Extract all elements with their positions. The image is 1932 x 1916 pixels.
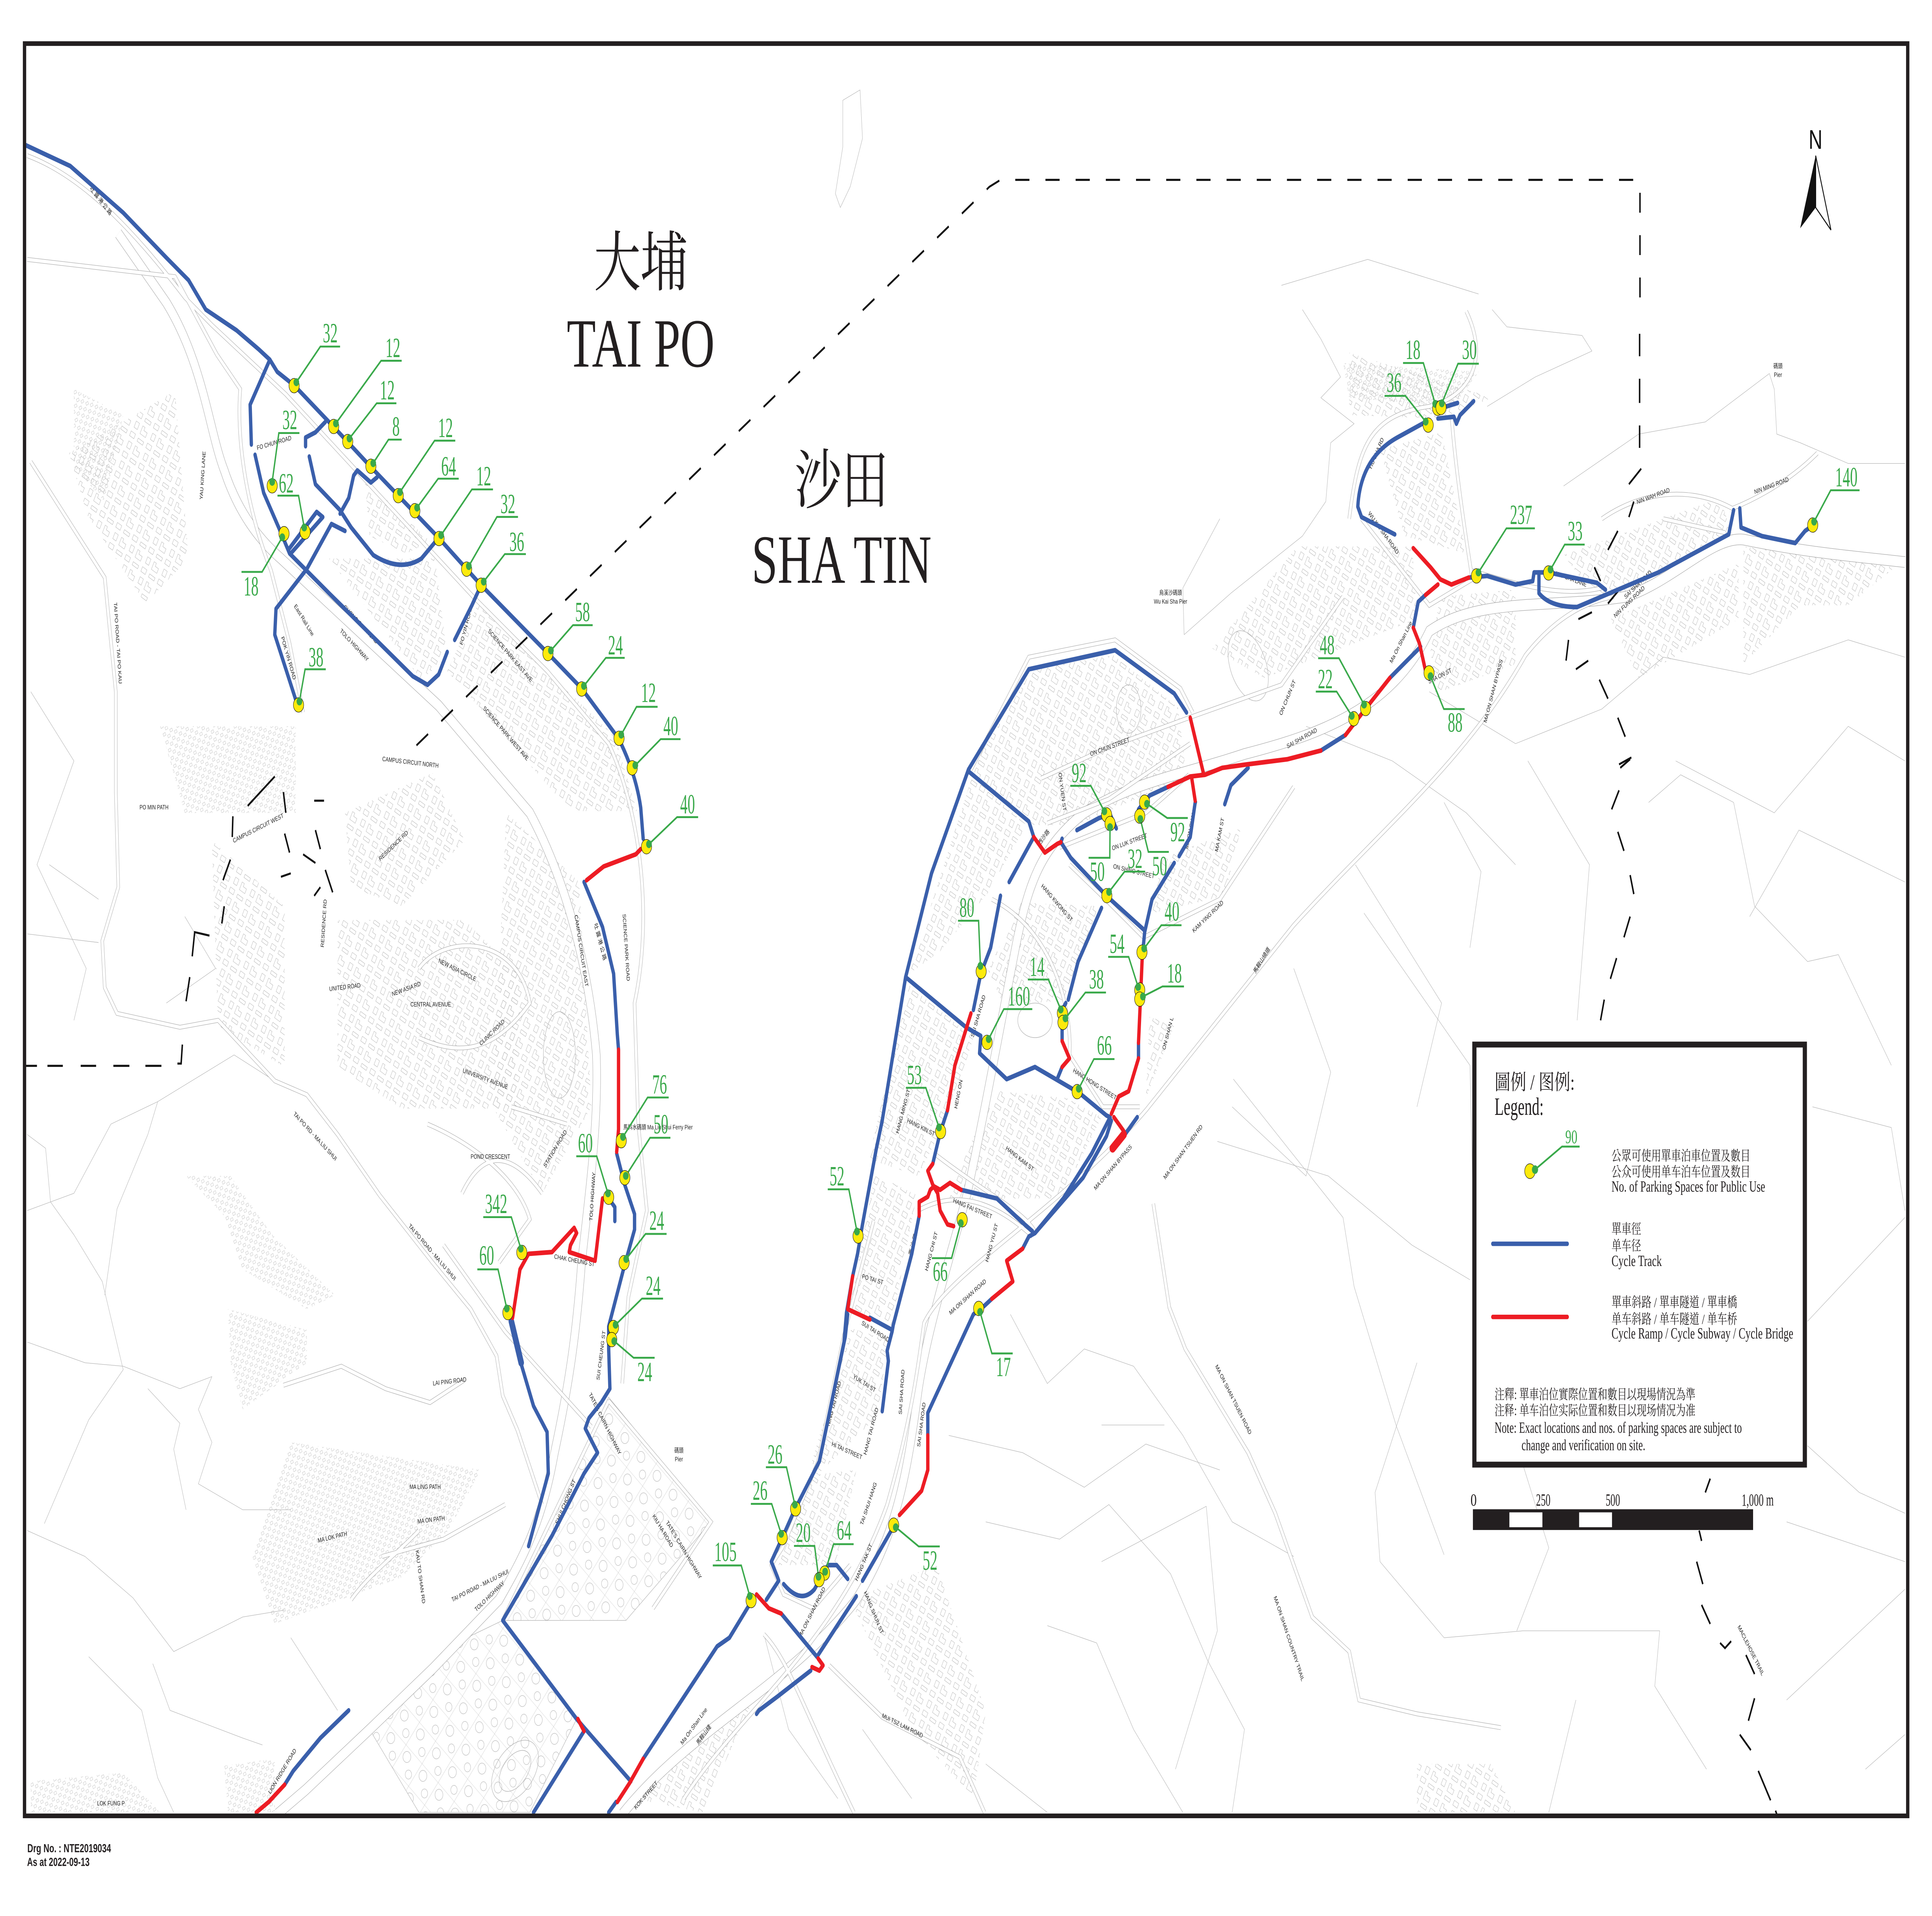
road names: HANG HONG STREET [1072, 1067, 1117, 1102]
legend symbol: cycle track [1493, 1243, 1567, 1244]
legend text: cycle ramp: 单车斜路 / 单车隧道 / 单车桥 [1612, 1311, 1737, 1327]
parking 92 [1070, 758, 1112, 822]
road names: YAU KING LANE [199, 451, 207, 500]
road names: ON CHUN ST [1279, 679, 1297, 717]
parking 24 [619, 1206, 667, 1270]
parking 60 [576, 1128, 614, 1205]
road names: KAM YING ROAD [1192, 899, 1225, 934]
parking 140 [1808, 462, 1859, 532]
parking 92 [1139, 795, 1188, 847]
road names: NEW ASIA RD [391, 980, 421, 998]
parking 22 [1316, 664, 1359, 726]
road names: 西沙路 [1037, 828, 1051, 847]
legend note: Note: Exact locations and nos. of parking spaces are subject to [1495, 1419, 1742, 1436]
road names: 馬鞍山繞道 [1252, 946, 1271, 975]
road names: NIN FUNG ROAD [1613, 585, 1646, 620]
parking 88 [1424, 665, 1464, 738]
road names: Ma On Shan Line [1389, 620, 1413, 665]
parking 30: 30 [1462, 335, 1477, 365]
parking 17 [973, 1301, 1013, 1382]
road names: MA LING PATH [410, 1484, 441, 1491]
parking 12 [342, 375, 396, 449]
parking 50: 50 [1152, 851, 1167, 881]
place name: Sha Tin: 沙田 [795, 444, 888, 517]
road names: MA ON SHAN RD [1184, 799, 1199, 850]
road names: YUK TAI ST [852, 1373, 876, 1394]
road names: Pier [675, 1456, 683, 1463]
parking 66 [1072, 1031, 1114, 1099]
road names: LION RIDGE ROAD [267, 1747, 298, 1796]
parking 62: 62 [279, 468, 294, 499]
parking 22: 22 [1318, 664, 1333, 694]
road names: KIU HA ROAD [651, 1513, 674, 1549]
parking 88: 88 [1448, 708, 1463, 738]
legend text: parking spaces [1612, 1148, 1765, 1195]
road names: 馬料水碼頭 Ma Liu Shui Ferry Pier [623, 1123, 693, 1131]
road names: HANG TAI ROAD [863, 1407, 879, 1456]
road names: POND CRESCENT [471, 1154, 510, 1160]
road names: TATE'S CAIRN HIGHWAY [588, 1392, 622, 1457]
parking 36: 36 [1387, 368, 1401, 398]
legend note: change and verification on site. [1522, 1436, 1645, 1454]
parking 64 [410, 451, 459, 518]
road names: 碼頭 [674, 1447, 684, 1455]
parking 62 [277, 468, 310, 539]
parking 58 [543, 597, 593, 661]
parking 66: 66 [1097, 1031, 1112, 1061]
legend text: cycle track: 單車徑 [1612, 1221, 1641, 1237]
road names: FO CHUN ROAD [257, 435, 292, 452]
parking 12 [614, 678, 658, 745]
parking 26: 26 [753, 1476, 767, 1506]
road names: LOK FUNG P [97, 1800, 125, 1807]
parking 342: 342 [485, 1189, 507, 1219]
road names: RESIDENCE RD [378, 829, 409, 863]
road names: HANG MING ST [895, 1088, 911, 1135]
road names: Pier [1774, 372, 1782, 379]
road names: KOK STREET [633, 1780, 659, 1811]
parking 12: 12 [438, 413, 453, 443]
drawing reference: Drg No. : NTE2019034 [27, 1841, 111, 1855]
parking 32 [267, 405, 299, 493]
parking 18 [1134, 958, 1184, 1006]
parking 14: 14 [1030, 952, 1044, 982]
parking 12: 12 [476, 461, 491, 492]
parking 18: 18 [1406, 335, 1420, 365]
parking 80: 80 [959, 893, 974, 923]
road names: SAI SHA ROAD [1623, 569, 1653, 601]
parking 32: 32 [1128, 844, 1143, 874]
road names: NEW ASIA CIRCLE [438, 957, 477, 983]
legend heading: Legend: [1495, 1093, 1544, 1121]
road names: HENG ON [953, 1079, 964, 1109]
road names: TOLO HIGHWAY [588, 1172, 597, 1221]
road names: ON CHUN STREET [1090, 736, 1130, 758]
legend text: parking spaces: No. of Parking Spaces for Public Use [1612, 1178, 1765, 1195]
north arrow [1800, 124, 1831, 230]
parking 32: 32 [500, 489, 515, 519]
road names: HANG TAK ST [854, 1542, 874, 1582]
legend symbol: parking spaces: 90 [1565, 1126, 1577, 1148]
parking 60 [477, 1240, 513, 1320]
parking 40 [641, 790, 698, 854]
road names: SCIENCE PARK WEST AVE [482, 705, 529, 762]
panel: legend [1475, 1045, 1805, 1465]
parking 66 [932, 1213, 968, 1287]
road names: TAI PO ROAD - TAI PO KAU [112, 602, 122, 684]
road names: HANG SHUN ST [863, 1590, 884, 1635]
drawing reference [27, 1841, 111, 1869]
parking 54 [1108, 929, 1145, 997]
parking 76: 76 [652, 1070, 667, 1100]
parking 52: 52 [923, 1546, 937, 1576]
parking 12 [393, 413, 455, 503]
road names: ON SHING STREET [1113, 863, 1155, 880]
road names: SUI CHEUNG ST [596, 1330, 607, 1381]
tank farm and industrial blocks [370, 1397, 711, 1812]
legend heading [1495, 1070, 1575, 1121]
road names: RESIDENCE RD [320, 899, 328, 948]
road names: CHONG SAN ROAD [342, 604, 379, 646]
road names: TAI PO ROAD - MA LIU SHUI [451, 1568, 509, 1604]
road names: 馬鞍山綫 [696, 1723, 712, 1747]
road names: PO MIN PATH [139, 804, 168, 811]
legend text: cycle track: 单车径 [1612, 1238, 1641, 1254]
parking 48 [1318, 630, 1371, 716]
road names: LAI PING ROAD [433, 1376, 467, 1387]
road names: MUI TSZ LAM ROAD [881, 1712, 923, 1740]
road names: NIN MING ROAD [1754, 476, 1789, 496]
parking 80 [958, 893, 986, 978]
place name: Tai Po: TAI PO [567, 305, 714, 382]
legend symbol: parking spaces [1525, 1126, 1580, 1179]
legend note: 注釋: 單車泊位實際位置和數目以現場情況為準 [1495, 1387, 1696, 1402]
road names: YIU SHA RD [1368, 436, 1385, 471]
parking 50: 50 [653, 1109, 668, 1140]
legend text: parking spaces: 公众可使用单车泊车位置及数目 [1612, 1164, 1750, 1179]
road names: East Rail Line [293, 603, 315, 638]
road names: TOLO HIGHWAY [339, 628, 369, 664]
parking 105 [713, 1537, 756, 1608]
road names: MA ON SHAN BYPASS [1093, 1143, 1133, 1192]
parking 24: 24 [649, 1206, 664, 1236]
road names: KAU TO SHAN RD [414, 1550, 426, 1604]
parking 40: 40 [1165, 897, 1179, 927]
road names: CAMPUS CIRCUIT NORTH [382, 756, 439, 770]
road names: 烏溪沙碼頭 [1159, 589, 1182, 597]
parking 54: 54 [1110, 929, 1124, 959]
road names: MA ON PATH [417, 1515, 445, 1525]
legend text: cycle track: Cycle Track [1612, 1252, 1662, 1269]
scale bar: 500 [1605, 1491, 1620, 1509]
place name: Tai Po: 大埔 [594, 226, 687, 299]
road names: CAMPUS CIRCUIT WEST [232, 812, 284, 845]
parking 32 [1102, 844, 1145, 903]
parking 32: 32 [282, 405, 297, 435]
parking 38 [1058, 965, 1106, 1029]
road names: UNIVERSITY AVENUE [462, 1067, 509, 1091]
parking 12: 12 [641, 678, 656, 708]
scale bar: 250 [1536, 1491, 1551, 1509]
road names: SHA ON ST [1428, 667, 1452, 686]
parking 24 [577, 630, 625, 696]
road names: SAI SHA ROAD [916, 1402, 927, 1448]
parking 60: 60 [479, 1240, 494, 1271]
parking 52 [828, 1161, 863, 1243]
parking 8: 8 [392, 412, 400, 442]
parking 18 [1403, 335, 1443, 415]
parking 26 [751, 1476, 787, 1545]
road names: TAI SHUI HANG [859, 1481, 878, 1526]
cycle ramps, subways and bridges [256, 548, 1469, 1812]
road names: Wu Kai Sha Pier [1154, 598, 1187, 605]
parking 32 [461, 489, 518, 577]
parking 92: 92 [1170, 817, 1185, 847]
road names: STATION ROAD [543, 1129, 568, 1169]
parking 38: 38 [309, 642, 323, 672]
road names: 碼頭 [1774, 363, 1783, 370]
parking 38: 38 [1089, 965, 1104, 995]
parking 237 [1471, 500, 1535, 583]
road names: NIN WAH ROAD [1636, 487, 1670, 506]
road names: MA ON SHAN BYPASS [1483, 659, 1504, 724]
parking 53: 53 [907, 1060, 922, 1091]
road names: 西 沙 路 [908, 1232, 918, 1256]
road names: MA KAM ST [1214, 817, 1226, 853]
legend text: cycle ramp [1612, 1295, 1793, 1342]
road names: MA ON SHAN COUNTRY TRAIL [1272, 1595, 1305, 1682]
parking 24: 24 [608, 630, 623, 661]
parking 66: 66 [933, 1257, 947, 1287]
parking 12 [328, 333, 402, 434]
road names: TAI PO RD - MA LIU SHUI [293, 1111, 338, 1162]
road names: SAI SHA ROAD [1286, 727, 1318, 750]
parking 24: 24 [646, 1271, 661, 1301]
parking 24: 24 [638, 1357, 652, 1387]
parking 20: 20 [796, 1518, 811, 1548]
legend text: cycle ramp: 單車斜路 / 單車隧道 / 單車橋 [1612, 1295, 1737, 1310]
parking 33 [1543, 516, 1585, 580]
parking 38 [293, 642, 326, 712]
road names: CLINIC ROAD [479, 1018, 506, 1047]
road names: MACLEHOSE TRAIL [1736, 1624, 1765, 1677]
parking 237: 237 [1510, 500, 1532, 530]
hillside villages [31, 363, 1479, 1812]
parking 12 [434, 461, 493, 546]
parking 30 [1436, 335, 1479, 415]
parking 52 [888, 1518, 940, 1576]
road names: ON LUK STREET [1111, 832, 1148, 852]
parking 52: 52 [830, 1161, 844, 1191]
road names: NING TAI ROAD [826, 1380, 842, 1427]
place name: Sha Tin [752, 444, 932, 598]
legend text: parking spaces: 公眾可使用單車泊車位置及數目 [1612, 1148, 1750, 1164]
parking 33: 33 [1568, 516, 1583, 546]
parking 50: 50 [1090, 857, 1105, 887]
parking 24 [608, 1271, 663, 1335]
parking 160 [982, 982, 1032, 1050]
parking 40 [1137, 897, 1182, 960]
legend heading: 圖例 / 图例: [1495, 1070, 1575, 1094]
parking 20 [794, 1518, 824, 1587]
road names: WO SHA LANE [1556, 570, 1587, 589]
parking 64: 64 [837, 1516, 852, 1546]
parking 18: 18 [1167, 958, 1182, 989]
racecourse and stadium outlines [483, 621, 1277, 1814]
road names: ON YUEN ST [1057, 772, 1067, 812]
road names: PO TAI ST [862, 1273, 884, 1286]
scale bar [1471, 1491, 1774, 1530]
road names: TATE'S CAIRN HIGHWAY [665, 1520, 702, 1581]
parking 342 [483, 1189, 527, 1260]
road names: 吐 露 港 公 路 [89, 185, 113, 217]
road names: HANG CHI ST [924, 1231, 939, 1272]
road names: HANG FAI STREET [952, 1197, 993, 1221]
road names: POK YIN ROAD [280, 636, 297, 681]
road names: TAI PO ROAD - MA LIU SHUI [407, 1223, 457, 1282]
road names: SAI SHA ROAD [898, 1369, 906, 1415]
parking 40 [627, 711, 680, 775]
road names: SCIENCE PARK ROAD [621, 914, 631, 982]
legend note [1495, 1387, 1742, 1454]
road names: HANG KWONG ST [1040, 883, 1073, 924]
road names: MA ON SHAN ROAD [948, 1278, 987, 1317]
scale bar: 1,000 m [1742, 1491, 1774, 1509]
parking 58: 58 [575, 597, 590, 628]
parking 50 [1088, 816, 1115, 887]
road names: WU KAI SHA ROAD [1367, 510, 1400, 556]
parking 24 [607, 1332, 655, 1387]
road names: HANG KAM ST [1005, 1145, 1034, 1173]
parking 26: 26 [768, 1440, 782, 1470]
road names: SAI SHA ROAD [970, 994, 987, 1038]
parking 64: 64 [441, 451, 456, 482]
parking 53 [906, 1060, 946, 1139]
north arrow: N [1809, 124, 1823, 155]
road names: FO YIN ROAD [459, 605, 474, 646]
parking 8 [366, 412, 402, 473]
road names: ON SHAN L [1162, 1016, 1175, 1051]
parking 36: 36 [509, 527, 524, 557]
place name: Tai Po [567, 226, 714, 382]
road names: MA ON SHAN TSUEN ROAD [1214, 1363, 1252, 1436]
road names: SHUI CHONG ST [554, 1478, 577, 1526]
parking 26 [766, 1440, 801, 1516]
road names: CENTRAL AVENUE [410, 1001, 451, 1008]
parking 105: 105 [714, 1537, 736, 1567]
parking 60: 60 [578, 1128, 593, 1159]
parking 92: 92 [1072, 758, 1087, 788]
parking 18 [242, 526, 289, 602]
parking 18: 18 [244, 572, 259, 602]
parking 40: 40 [680, 790, 695, 820]
legend text: cycle track [1612, 1221, 1662, 1269]
parking 14 [1028, 952, 1068, 1020]
road names: HANG KIN ST [906, 1117, 935, 1138]
road names: UNITED ROAD [329, 982, 361, 993]
parking 17: 17 [996, 1352, 1011, 1382]
parking 12: 12 [380, 375, 395, 405]
drawing reference: As at 2022-09-13 [27, 1855, 90, 1869]
parking 32: 32 [323, 318, 338, 349]
legend text: cycle ramp: Cycle Ramp / Cycle Subway / Cycle Bridge [1612, 1325, 1793, 1342]
road names [89, 185, 1789, 1811]
parking 36 [1384, 368, 1434, 432]
place name: Sha Tin: SHA TIN [752, 521, 932, 598]
road names: TOLO HIGHWAY [474, 1579, 505, 1613]
road casings [118, 233, 1905, 1814]
built-up areas [69, 353, 1895, 1812]
road names: MA LOK PATH [317, 1530, 347, 1545]
scale bar: 0 [1471, 1491, 1477, 1509]
parking 50 [620, 1109, 670, 1185]
road names: SUI TAI ROAD [861, 1320, 890, 1344]
road names: MA ON SHAN TSUEN RD [1163, 1123, 1204, 1181]
road names: SCIENCE PARK EAST AVE [487, 628, 533, 684]
road names: CAMPUS CIRCUIT EAST [573, 914, 589, 987]
boundary between Tai Po and Sha Tin districts [26, 180, 1777, 1814]
road names: HANG YIU ST [985, 1222, 999, 1263]
parking 76 [616, 1070, 669, 1148]
road names: CHAK CHEUNG ST [554, 1253, 595, 1268]
parking 64 [820, 1516, 854, 1580]
parking 48: 48 [1320, 630, 1335, 660]
parking 50 [1134, 809, 1169, 881]
parking 36 [476, 527, 526, 592]
road names: Ma On Shan Line [680, 1706, 708, 1746]
parking 140: 140 [1835, 462, 1857, 493]
road names: 吐 露 港 公 路 [593, 922, 607, 961]
legend note: 注释: 单车泊位实际位置和数目以现场情况为准 [1495, 1403, 1696, 1418]
parking 40: 40 [663, 711, 678, 742]
parking 160: 160 [1008, 982, 1030, 1012]
parking 32 [289, 318, 340, 393]
parking 12: 12 [386, 333, 400, 363]
road names: MA ON SHAN ROAD [798, 1586, 827, 1639]
road names: HI TAI STREET [831, 1441, 863, 1461]
